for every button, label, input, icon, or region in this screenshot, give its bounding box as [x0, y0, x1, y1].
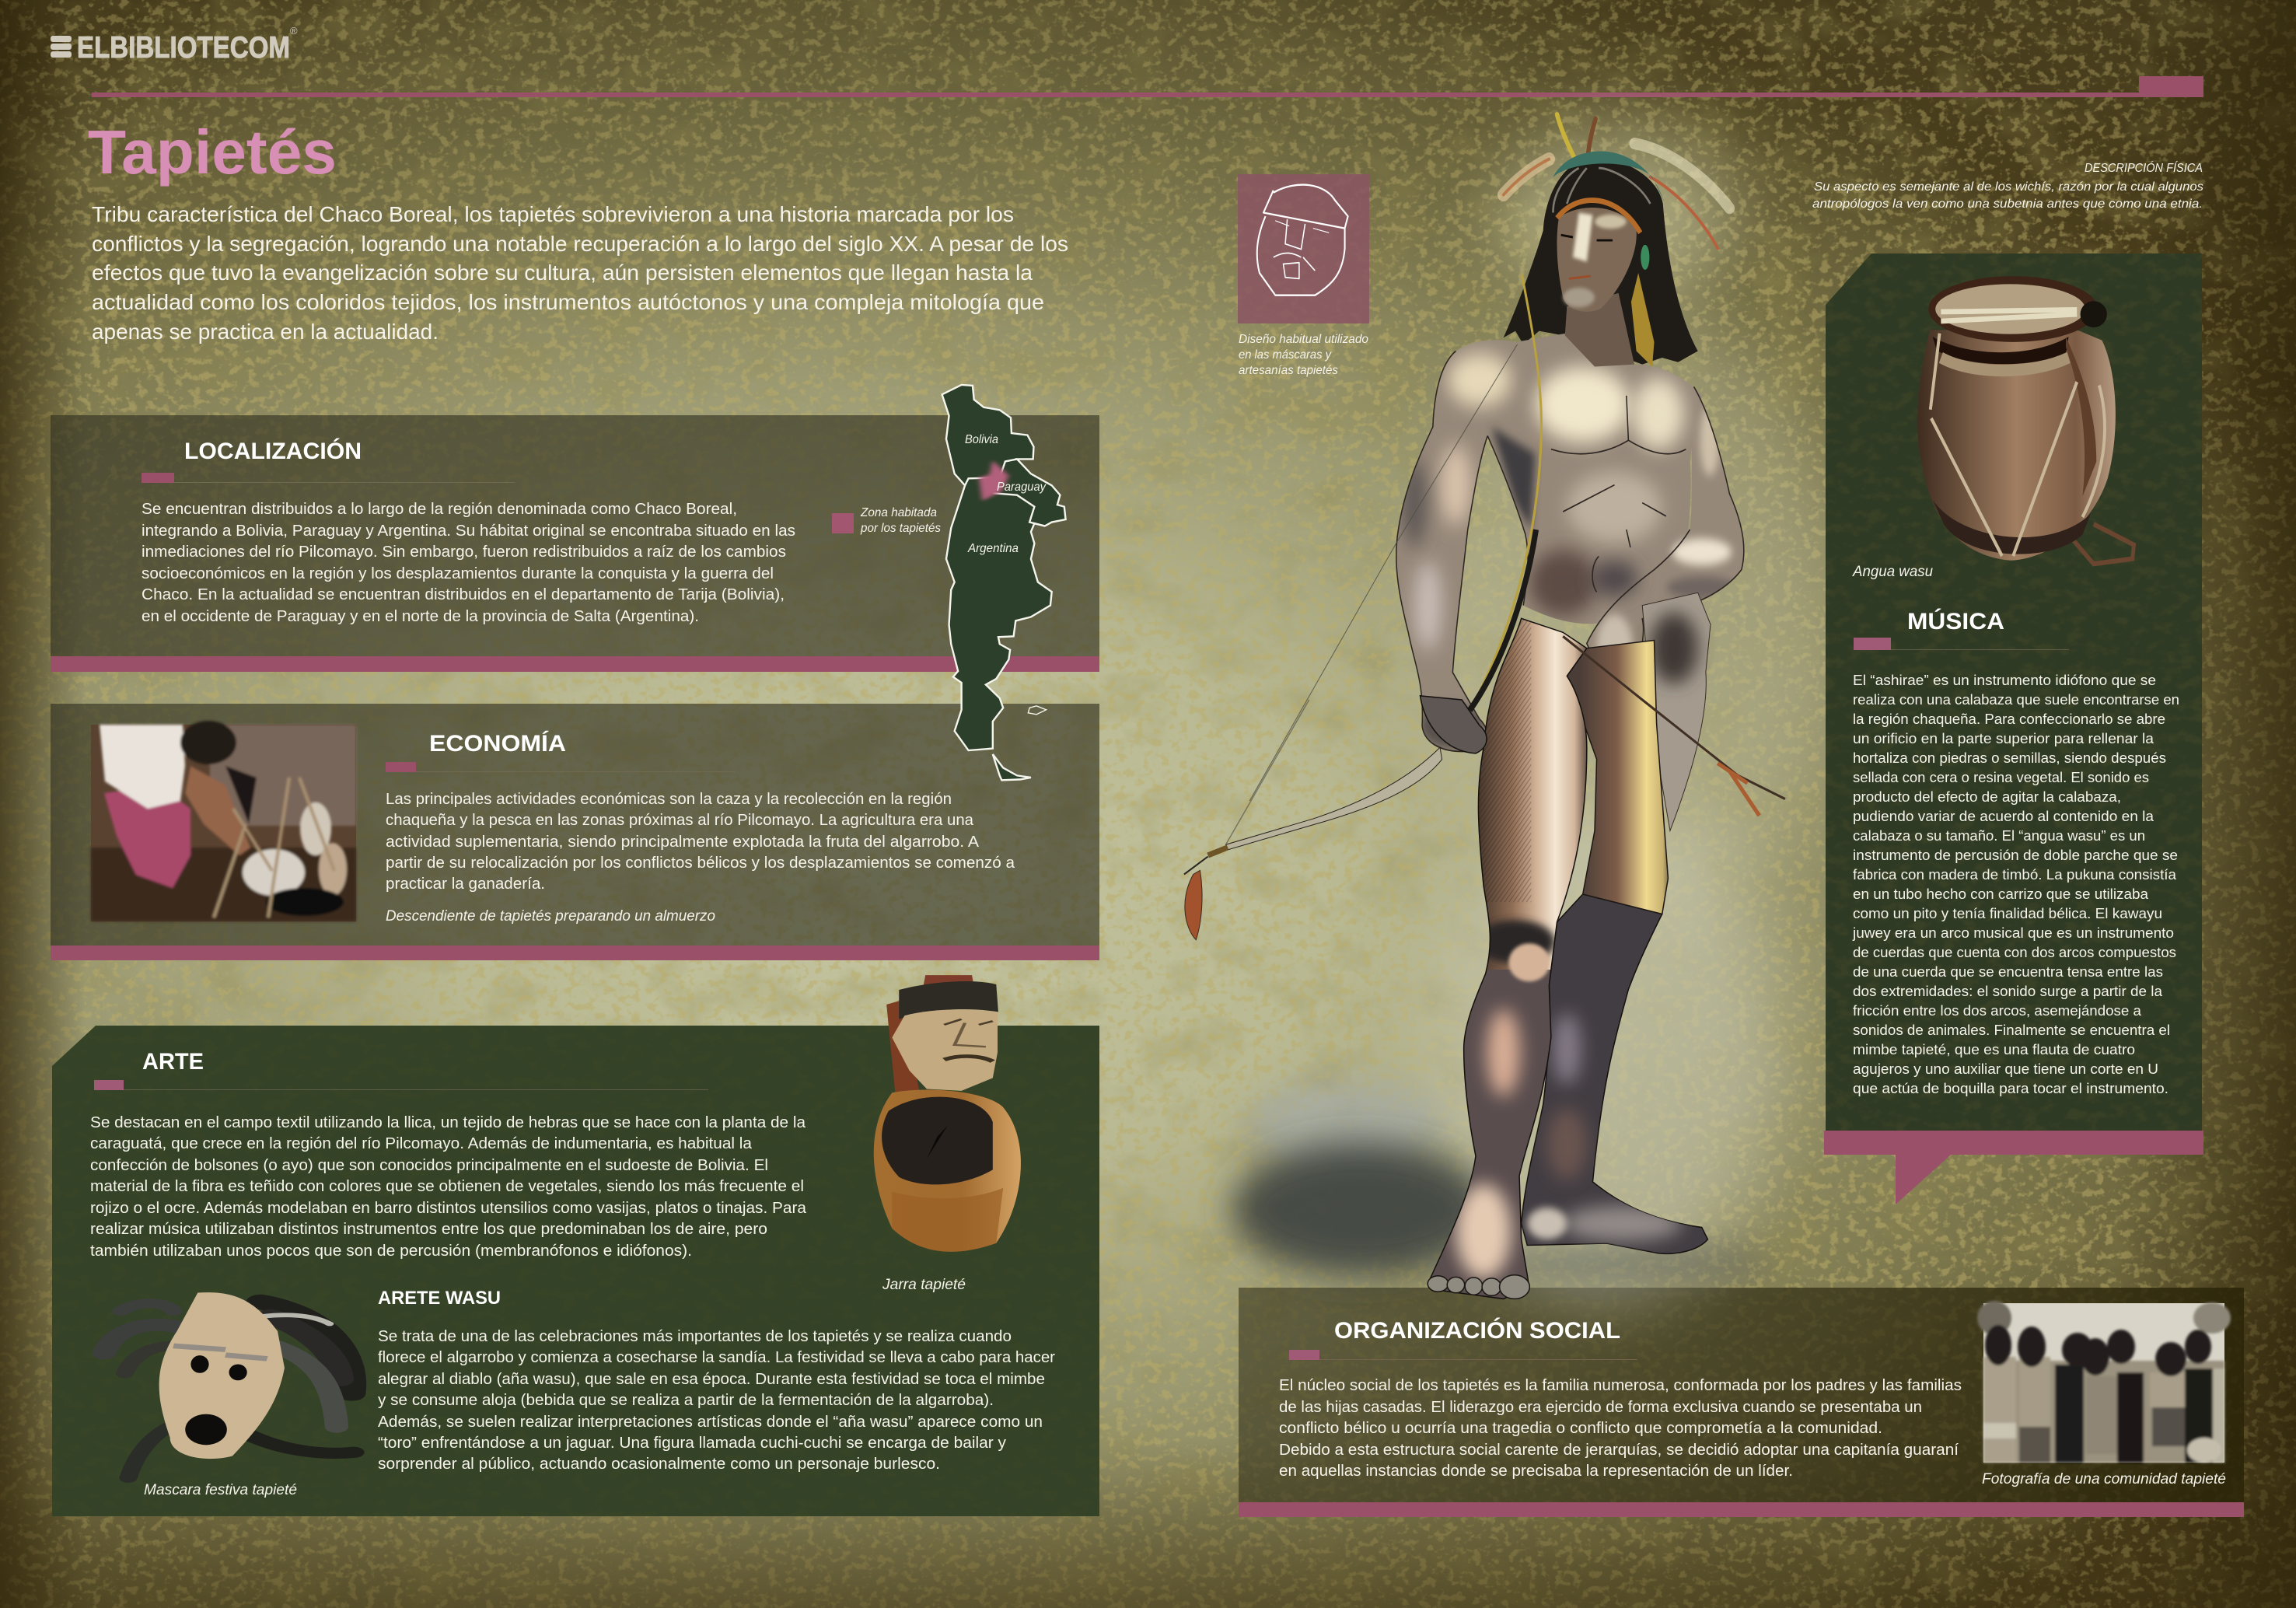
map legend: Zona habitada — [860, 506, 937, 519]
text: economía: actividad suplementaria, siendo principalmente explotada la fruta del algarrobo. A — [386, 833, 979, 851]
text: música — [1852, 672, 2179, 1096]
map legend — [832, 506, 941, 535]
cloth panel — [1567, 640, 1668, 914]
text: música: de cuerdas que cuenta con dos arcos compuestos — [1853, 944, 2176, 960]
front leg — [1428, 618, 1587, 1299]
text: arete wasu: Además, se suelen realizar interpretaciones artísticas donde el “aña wasu” aparece como un — [378, 1413, 1043, 1431]
text: música: hortaliza con piedras o semillas, siendo después — [1853, 750, 2166, 766]
text: arte: caraguatá, que crece en la región del río Pilcomayo. Además de indumentaria, es habitual la — [90, 1134, 753, 1152]
intro text: apenas se practica en la actualidad. — [92, 320, 439, 344]
text: música: que actúa de boquilla para tocar el instrumento. — [1853, 1080, 2168, 1096]
text: organización social: El núcleo social de los tapietés es la familia numerosa, conformada por los padres y las familias — [1279, 1376, 1962, 1394]
text: localización: en el occidente de Paraguay y en el norte de la provincia de Salta (Argentina). — [142, 607, 699, 625]
bow string — [1249, 344, 1518, 801]
rear leg — [1522, 894, 1707, 1253]
intro text — [92, 202, 1068, 344]
caption: máscaras: artesanías tapietés — [1239, 364, 1338, 377]
image: jarra tapieté — [874, 975, 1021, 1252]
text: música: en un tubo hecho con carrizo que se utilizaba — [1853, 886, 2149, 902]
headband — [1557, 201, 1641, 232]
intro text: efectos que tuvo la evangelización sobre su cultura, aún persisten elementos que llegan hasta la — [92, 260, 1033, 285]
text: economía: partir de su relocalización por los conflictos bélicos y los desplazamientos se comenzó a — [386, 854, 1015, 872]
text: descripción física: DESCRIPCIÓN FÍSICA — [2085, 160, 2203, 175]
heading: arete wasu: ARETE WASU — [378, 1288, 501, 1309]
text: economía: chaqueña y la pesca en las zonas próximas al río Pilcomayo. La agricultura era una — [386, 811, 974, 829]
heading: arte: ARTE — [142, 1049, 204, 1075]
text: economía: practicar la ganadería. — [386, 875, 545, 893]
text: música: realiza con una calabaza que suele encontrarse en — [1853, 691, 2179, 708]
body base shapes — [1396, 333, 1744, 751]
text: arete wasu: Se trata de una de las celebraciones más importantes de los tapietés y se realiza cuando — [378, 1327, 1012, 1345]
map: bolivia, paraguay, argentina: Bolivia — [965, 433, 998, 446]
text: localización: socioeconómicos en la región y los desplazamientos durante la conquista y la guerra del — [142, 565, 774, 582]
text: música: juwey era un arco musical que es un instrumento — [1852, 925, 2174, 941]
heading tab — [142, 473, 515, 483]
text: música: calabaza o su tamaño. El “angua wasu” es un — [1853, 827, 2145, 844]
text: música: El “ashirae” es un instrumento idiófono que se — [1853, 672, 2156, 688]
intro text: actualidad como los coloridos tejidos, los instrumentos autóctonos y una compleja mitología que — [92, 290, 1044, 314]
text: descripción física — [1812, 160, 2203, 211]
panel: organización social background — [1239, 1288, 2244, 1517]
caption: máscara: Mascara festiva tapieté — [144, 1482, 297, 1498]
text: música: sellada con cera o resina vegetal. El sonido es — [1853, 769, 2149, 785]
caption: máscaras: en las máscaras y — [1239, 348, 1332, 362]
caption: comunidad: Fotografía de una comunidad tapieté — [1982, 1471, 2226, 1487]
panel: arte — [52, 975, 1099, 1516]
body shading — [1403, 353, 1738, 748]
icon: mask design — [1238, 174, 1369, 323]
logo: elbibliotecom: ELBIBLIOTECOM — [77, 31, 290, 65]
text: organización social: en aquellas instancias donde se precisaba la representación de un líder. — [1279, 1462, 1793, 1480]
text: arte: rojizo o el ocre. Además modelaban en barro distintos utensilios como vasijas, platos o tinajas. Para — [90, 1199, 807, 1217]
text: música: fricción entre los dos arcos, asemejándose a — [1853, 1002, 2142, 1019]
photo: descendiente de tapietés — [91, 721, 356, 921]
eyes and mouth — [1561, 235, 1613, 278]
body outlines — [1396, 351, 1744, 751]
heading: música: MÚSICA — [1907, 608, 2004, 634]
image: angua wasu drum — [1917, 276, 2133, 564]
intro text: conflictos y la segregación, logrando una notable recuperación a lo largo del siglo XX. A pesar de los — [92, 232, 1068, 256]
heading: organización social: ORGANIZACIÓN SOCIAL — [1334, 1317, 1620, 1344]
neck — [1565, 293, 1634, 367]
map: bolivia, paraguay, argentina: Argentina — [967, 542, 1019, 555]
text: descripción física: Su aspecto es semejante al de los wichís, razón por la cual algunos — [1814, 180, 2203, 194]
text: música: producto del efecto de agitar la calabaza, — [1853, 788, 2121, 805]
text: música: un orificio en la parte superior para rellenar la — [1853, 730, 2154, 746]
photo: comunidad tapieté — [1977, 1301, 2231, 1463]
bow upper part — [1470, 275, 1541, 711]
text: arete wasu: sorprender al público, actuando ocasionalmente como un personaje burlesco. — [378, 1455, 940, 1473]
text: arte: también utilizaban unos pocos que son de percusión (membranófonos e idiófonos). — [90, 1242, 692, 1260]
text: música: dos extremidades: el sonido surge a partir de la — [1853, 983, 2163, 999]
face — [1557, 208, 1637, 312]
text: organización social: conflicto bélico u ocurría una tragedia o conflicto que comprometía a la comunidad. — [1279, 1419, 1882, 1437]
top rule with end block — [92, 76, 2203, 97]
text: música: sonidos de animales. Finalmente se encuentra el — [1853, 1022, 2170, 1038]
text: música: mimbe tapieté, que es una flauta de cuatro — [1853, 1041, 2135, 1057]
figure: tapieté warrior illustration — [1184, 114, 1843, 1327]
text: descripción física: antropólogos la ven como una subetnia antes que como una etnia. — [1812, 198, 2203, 211]
text: música: como un pito y tenía finalidad bélica. El kawayu — [1853, 905, 2162, 921]
heading tab — [94, 1080, 708, 1090]
speech tail bar — [1824, 1131, 2203, 1204]
map legend: por los tapietés — [860, 522, 941, 535]
text: arte: material de la fibra es teñido con colores que se obtienen de vegetales, siendo los más frecuente el — [90, 1177, 804, 1195]
text: localización — [142, 500, 795, 625]
title: Tapietés — [88, 117, 337, 187]
text: música: instrumento de percusión de doble parche que se — [1853, 847, 2178, 863]
heading tab — [386, 762, 736, 772]
text: economía: Las principales actividades económicas son la caza y la recolección en la región — [386, 790, 952, 808]
caption: angua wasu: Angua wasu — [1852, 564, 1933, 580]
text: localización: integrando a Bolivia, Paraguay y Argentina. Su hábitat original se encontraba situado en las — [142, 522, 795, 540]
text: arte — [90, 1113, 807, 1260]
map: bolivia, paraguay, argentina — [942, 385, 1066, 780]
text: música: fabrica con madera de timbó. La pukuna consistía — [1853, 866, 2177, 883]
text: localización: inmediaciones del río Pilcomayo. Sin embargo, fueron redistribuidos a raíz de los cambios — [142, 543, 786, 561]
text: arte: realizar música utilizaban distintos instrumentos entre los que predominaban los de aire, pero — [90, 1220, 767, 1238]
heading tab — [1854, 638, 2069, 650]
caption: máscaras — [1239, 333, 1368, 377]
text: organización social: de las hijas casadas. El liderazgo era ejercido de forma exclusiva cuando se presentaba un — [1279, 1398, 1922, 1416]
ear feather — [1631, 273, 1655, 367]
heading: economía: ECONOMÍA — [429, 730, 566, 757]
upper body — [1249, 114, 1744, 801]
arrow through hand — [1563, 636, 1785, 799]
text: arete wasu: y se consume aloja (bebida que se realiza a partir de la fermentación de la algarroba). — [378, 1391, 994, 1409]
text: localización: Se encuentran distribuidos a lo largo de la región denominada como Chaco Boreal, — [142, 500, 737, 518]
text: arete wasu — [378, 1327, 1055, 1473]
heading: localización: LOCALIZACIÓN — [184, 438, 362, 464]
text: arete wasu: florece el algarrobo y comienza a cosecharse la sandía. La festividad se lleva a cabo para hacer — [378, 1348, 1055, 1366]
text: música: agujeros y uno auxiliar que tiene un corte en U — [1853, 1061, 2158, 1077]
panel: localización — [51, 415, 1099, 672]
text: música: la región chaqueña. Para confeccionarlo se abre — [1853, 711, 2165, 727]
text: arete wasu: “toro” enfrentándose a un jaguar. Una figura llamada cuchi-cuchi se encarga de bailar y — [378, 1434, 1007, 1452]
text: música: pudiendo variar de acuerdo al contenido en la — [1853, 808, 2154, 824]
panel: organización social content — [1279, 1301, 2231, 1487]
heading tab — [1289, 1350, 1637, 1360]
caption: máscaras: Diseño habitual utilizado — [1239, 333, 1368, 346]
logo: elbibliotecom — [51, 25, 298, 65]
text: localización: Chaco. En la actualidad se encuentran distribuidos en el departamento de Tarija (Bolivia), — [142, 586, 785, 603]
text: arete wasu: alegrar al diablo (aña wasu), que sale en esa época. Durante esta festividad se toca el mimbe — [378, 1370, 1045, 1388]
lower body — [1184, 593, 1785, 1327]
rear hip — [1642, 593, 1711, 830]
panel: música — [1824, 253, 2203, 1204]
headdress — [1553, 151, 1664, 201]
text: arte: confección de bolsones (o ayo) que son conocidos principalmente en el sudoeste de Bolivia. El — [90, 1156, 768, 1174]
intro text: Tribu característica del Chaco Boreal, los tapietés sobrevivieron a una historia marcada por los — [92, 202, 1014, 226]
text: arte: Se destacan en el campo textil utilizando la llica, un tejido de hebras que se hace con la planta de la — [90, 1113, 806, 1131]
caption: jarra: Jarra tapieté — [882, 1277, 966, 1293]
panel: economía — [51, 704, 1099, 960]
hair — [1504, 159, 1698, 365]
map: bolivia, paraguay, argentina: Paraguay — [997, 481, 1047, 494]
caption: almuerzo: Descendiente de tapietés preparando un almuerzo — [386, 908, 715, 925]
hand — [1421, 696, 1487, 753]
feathers — [1504, 114, 1729, 248]
text: economía — [386, 790, 1015, 893]
image: máscara festiva — [104, 1292, 354, 1478]
logo: elbibliotecom: ® — [290, 25, 298, 37]
text: organización social — [1279, 1376, 1962, 1480]
text: música: de una cuerda que se encuentra tensa entre las — [1853, 963, 2163, 980]
bow lower part — [1226, 747, 1442, 850]
text: organización social: Debido a esta estructura social carente de jerarquías, se decidió adoptar una capitanía guaraní — [1279, 1441, 1959, 1459]
callout: diseño habitual — [1238, 174, 1369, 377]
figure glow and ground shadow — [1232, 132, 1843, 1299]
toes — [1428, 1275, 1529, 1299]
